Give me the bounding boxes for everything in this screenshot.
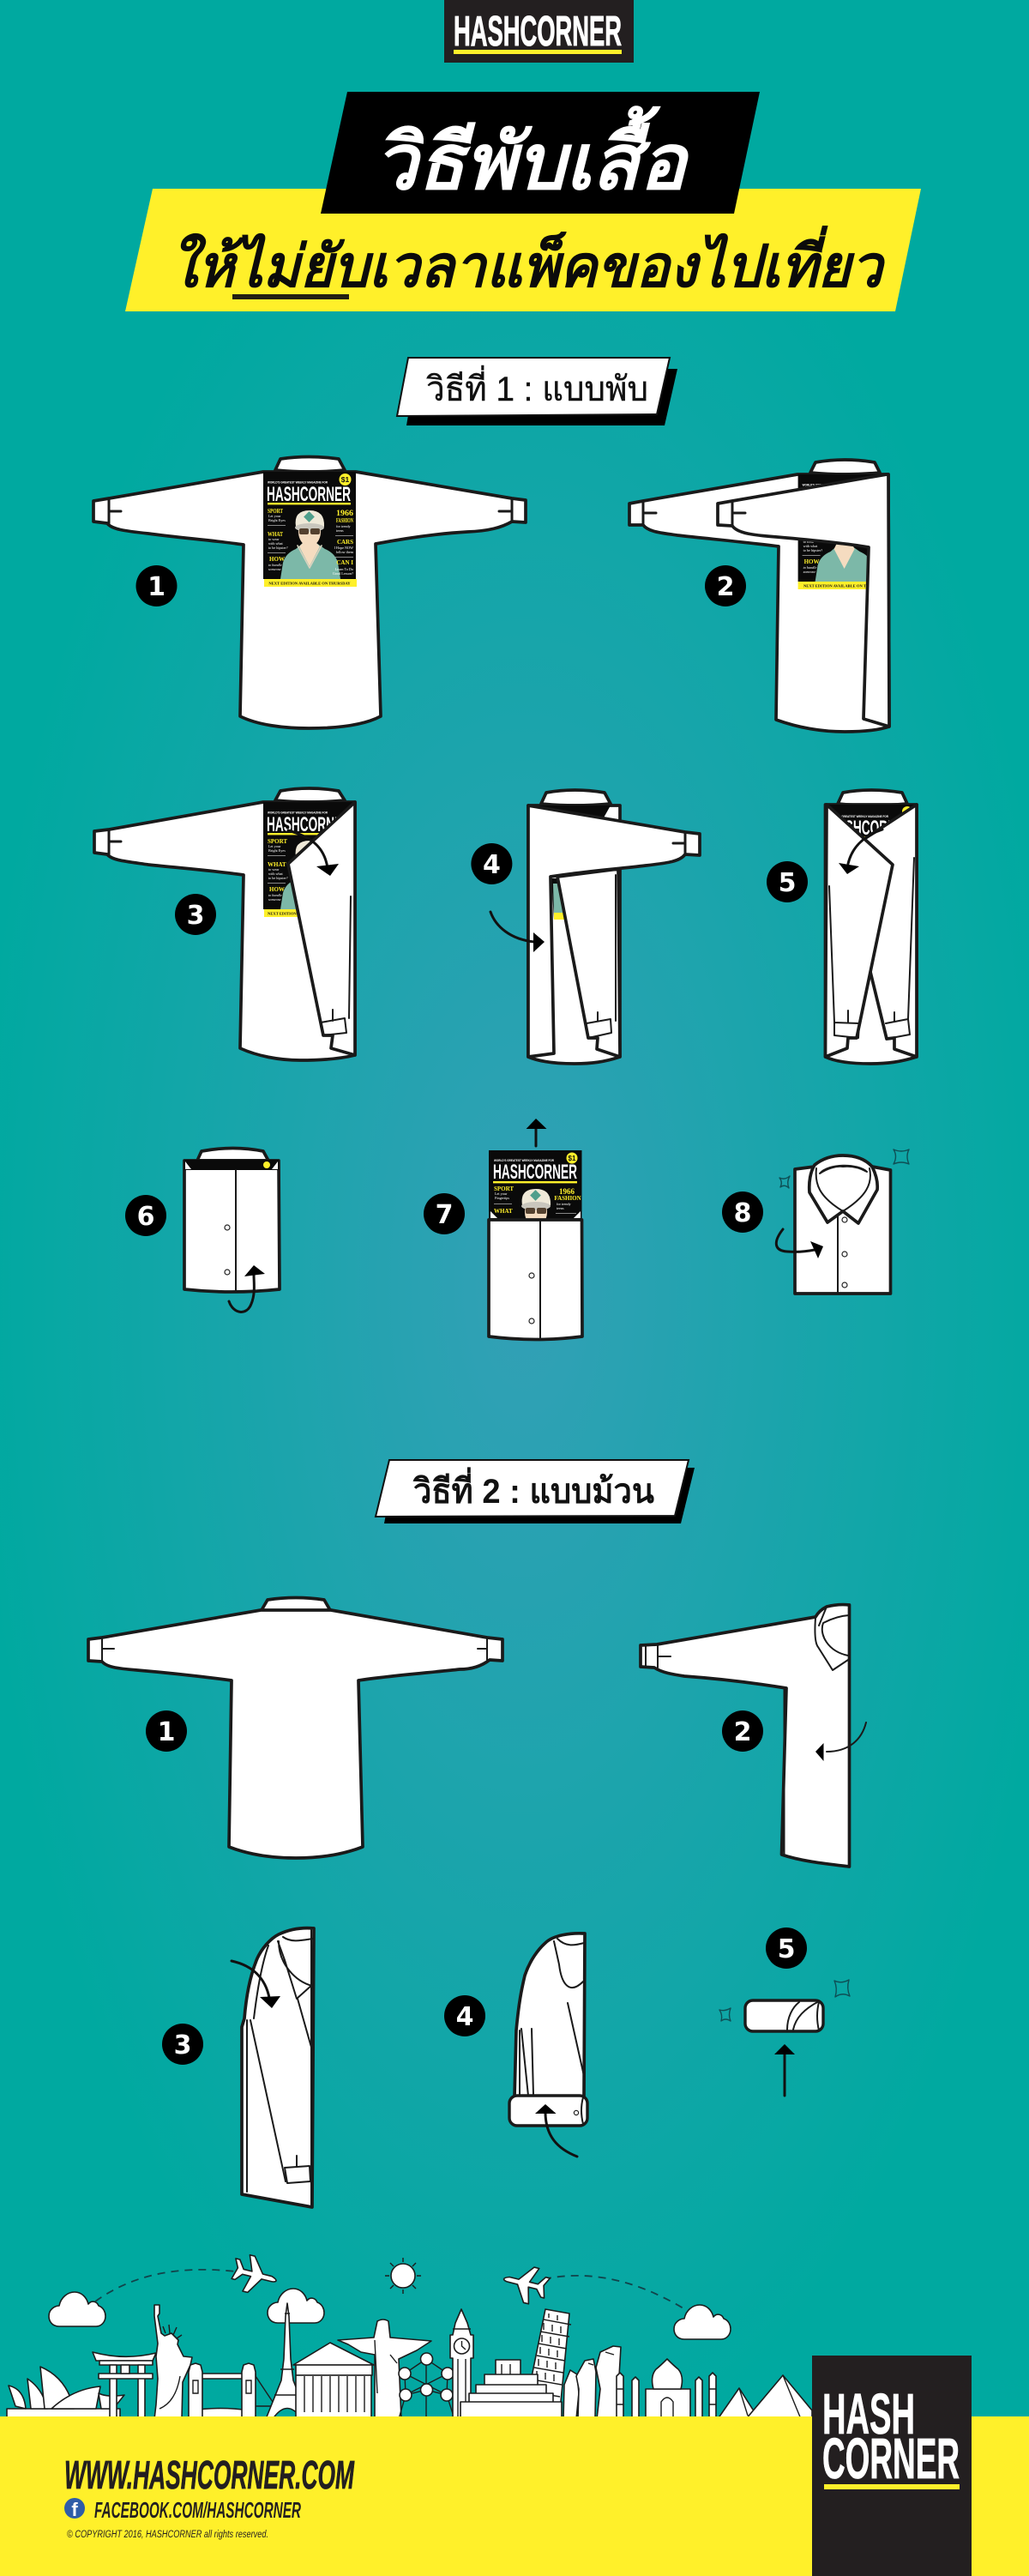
magazine cover: WHAT xyxy=(268,531,283,538)
icon: facebook xyxy=(64,2498,85,2520)
magazine cover: someone xyxy=(268,567,281,571)
torii gate xyxy=(93,2352,156,2418)
arrow xyxy=(229,1265,265,1312)
magazine partly covered: WORLD'S GREATEST WEEKLY MAGAZINE FOR xyxy=(803,482,863,487)
arrow up xyxy=(774,2044,795,2096)
planes xyxy=(228,2252,551,2308)
number badge 4: 4 xyxy=(483,850,501,880)
arrow xyxy=(288,830,339,876)
magazine partly covered: SPORT xyxy=(268,838,287,845)
number badge 3 xyxy=(175,894,216,935)
section label: method 1: วิธีที่ 1 : แบบพับ xyxy=(426,365,648,408)
roll xyxy=(509,2096,587,2126)
magazine partly covered xyxy=(798,474,888,589)
magazine partly covered: to be hipster? xyxy=(803,548,822,552)
number badge 1 xyxy=(135,565,177,606)
number badge 6: 6 xyxy=(137,1202,154,1232)
magazine cover: HASHCORNER xyxy=(267,483,351,506)
magazine partly covered: WORLD'S GREATEST WEEKLY MAGAZINE FOR xyxy=(268,810,328,815)
number badge 2-4 xyxy=(444,1995,485,2036)
christ the redeemer xyxy=(338,2320,431,2419)
icon: facebook: f xyxy=(71,2499,78,2520)
arrow xyxy=(815,1722,866,1761)
magazine cover: WORLD'S GREATEST WEEKLY MAGAZINE FOR xyxy=(268,480,328,484)
title banner xyxy=(125,92,921,311)
step 1-3: sleeve folded down xyxy=(94,788,355,1060)
magazine partly covered: to handle xyxy=(268,893,282,897)
step 1-5: both sides folded xyxy=(825,790,918,1064)
magazine cover: for trendy xyxy=(336,524,352,528)
magazine cover: teens xyxy=(336,528,344,533)
taj mahal with minarets xyxy=(617,2359,716,2419)
step 2-1: shirt open xyxy=(88,1597,502,1858)
sun xyxy=(385,2258,421,2294)
magazine top: Let your xyxy=(495,1191,508,1196)
magazine peek: HASHCORNER xyxy=(828,817,912,840)
magazine cover: HOW xyxy=(269,556,285,563)
section label: method 2: วิธีที่ 2 : แบบม้วน xyxy=(412,1467,654,1511)
step 1-4: other side folded xyxy=(490,790,700,1064)
arrow xyxy=(232,1961,280,2008)
step 2-5: finished roll xyxy=(719,1980,850,2096)
magazine cover: Learn To Do xyxy=(335,567,353,571)
magazine top: Fingertips xyxy=(495,1196,509,1200)
title line 2: ให้ไม่ยับเวลาแพ็คของไปเที่ยว xyxy=(170,226,886,299)
magazine cover: I Hope NOW xyxy=(334,546,353,550)
magazine partly covered: to handle xyxy=(803,565,816,570)
magazine top: 1966 xyxy=(559,1187,575,1196)
magazine top: $1 xyxy=(569,1155,576,1162)
magazine cover: to be hipster? xyxy=(268,546,288,550)
step 1-1: shirt open with magazine xyxy=(93,456,526,728)
number badge 8 xyxy=(722,1191,763,1233)
magazine top: WORLD'S GREATEST WEEKLY MAGAZINE FOR xyxy=(494,1158,554,1162)
tower bridge xyxy=(189,2363,273,2419)
magazine partly covered: NEXT EDITION AVAILABLE xyxy=(268,911,320,916)
magazine peek: WORLD'S GREATEST WEEKLY MAGAZINE FOR xyxy=(828,814,888,818)
magazine partly covered: someone xyxy=(803,570,815,574)
magazine top: for trendy xyxy=(557,1202,572,1206)
big ben xyxy=(450,2309,473,2419)
logo: top badge xyxy=(444,0,634,63)
magazine partly covered: HASHCORNER xyxy=(267,813,351,836)
number badge 3: 3 xyxy=(187,901,204,931)
magazine cover: SPORT xyxy=(268,508,283,515)
step 1-6: folded up xyxy=(184,1148,280,1312)
section label: method 2 xyxy=(376,1460,695,1523)
magazine cover: FASHION xyxy=(336,517,353,524)
title line 1: วิธีพับเสื้อ xyxy=(374,106,690,206)
magazine partly covered: Let your xyxy=(268,844,281,848)
number badge 4 xyxy=(471,843,512,884)
footer: facebook link: FACEBOOK.COM/HASHCORNER xyxy=(94,2497,301,2523)
skyline: world landmarks xyxy=(7,2252,812,2419)
magazine cover: Good Lesson? xyxy=(333,571,353,576)
number badge 2-3: 3 xyxy=(174,2030,191,2060)
number badge 7 xyxy=(424,1193,465,1234)
leaning tower of pisa xyxy=(523,2309,571,2419)
arrow up xyxy=(527,1119,547,1146)
number badge 2 xyxy=(705,565,746,606)
magazine partly covered xyxy=(263,802,355,917)
number badge 2: 2 xyxy=(717,572,734,602)
magazine cover: to handle xyxy=(268,563,282,567)
number badge 5: 5 xyxy=(779,868,796,898)
number badge 7: 7 xyxy=(436,1200,453,1230)
number badge 8: 8 xyxy=(734,1198,751,1228)
number badge 6 xyxy=(125,1195,166,1236)
magazine cover: CAN I xyxy=(336,559,353,566)
number badge 2-2 xyxy=(722,1710,763,1752)
number badge 2-4: 4 xyxy=(456,2002,473,2032)
magazine partly covered: to be hipster? xyxy=(268,876,288,880)
person xyxy=(280,510,340,579)
magazine top xyxy=(489,1150,581,1227)
magazine partly covered: with what xyxy=(803,544,818,548)
footer: website url: WWW.HASHCORNER.COM xyxy=(64,2452,355,2497)
arrow xyxy=(535,2104,577,2157)
magazine cover xyxy=(263,472,357,587)
step 1-2: left side folded xyxy=(629,460,889,732)
magazine top: FASHION xyxy=(554,1195,581,1202)
arrow xyxy=(776,1229,823,1258)
step 2-2: half folded xyxy=(641,1605,866,1867)
magazine cover: NEXT EDITION AVAILABLE ON THURSDAY xyxy=(268,582,351,585)
arrow xyxy=(490,912,545,952)
magazine partly covered: HOW xyxy=(804,558,819,565)
footer: copyright: © COPYRIGHT 2016, HASHCORNER all rights reserved. xyxy=(67,2530,268,2540)
number badge 1: 1 xyxy=(147,572,165,602)
atomium xyxy=(399,2353,454,2419)
magazine peek xyxy=(829,805,914,837)
magazine cover: $1 xyxy=(341,475,349,484)
easter island moai xyxy=(563,2346,621,2419)
magazine cover: to wear xyxy=(268,537,280,541)
sparkles xyxy=(719,1980,850,2021)
logo: footer block: HASH xyxy=(822,2382,915,2446)
sparkles xyxy=(779,1149,909,1188)
magazine top: SPORT xyxy=(494,1185,514,1192)
magazine partly covered: NEXT EDITION AVAILABLE ON THURSDAY xyxy=(803,583,886,588)
magazine partly covered: to wear xyxy=(803,540,815,544)
magazine cover: CARS xyxy=(337,539,353,546)
arrow xyxy=(839,830,882,874)
magazine cover: Let your xyxy=(268,514,281,518)
sydney opera house xyxy=(7,2367,124,2419)
magazine top: HASHCORNER xyxy=(493,1161,577,1184)
number badge 2-5: 5 xyxy=(778,1934,795,1964)
number badge 2-5 xyxy=(766,1927,807,1969)
magazine partly covered: someone xyxy=(268,897,281,902)
magazine top: WHAT xyxy=(494,1208,513,1215)
number badge 2-1: 1 xyxy=(158,1717,175,1747)
magazine cover: with what xyxy=(268,541,283,546)
step 1-8: finished folded shirt xyxy=(776,1149,909,1294)
number badge 2-1 xyxy=(146,1710,187,1752)
magazine partly covered: HOW xyxy=(269,886,285,893)
magazine cover: 1966 xyxy=(336,509,354,517)
eiffel tower xyxy=(266,2303,309,2419)
number badge 5 xyxy=(767,861,808,902)
magazine partly covered: WHAT xyxy=(268,861,286,868)
statue of liberty xyxy=(154,2305,192,2419)
pyramids xyxy=(718,2375,812,2419)
step 2-3: folded in half xyxy=(232,1928,314,2207)
step 1-7: magazine out xyxy=(489,1119,582,1340)
number badge 2-3 xyxy=(162,2024,203,2065)
section label: method 1 xyxy=(397,358,677,425)
clouds xyxy=(49,2289,731,2339)
logo: top badge: HASHCORNER xyxy=(454,9,622,55)
dashed flight paths xyxy=(95,2270,683,2308)
logo: footer block xyxy=(812,2356,972,2576)
step 2-4: rolling from bottom xyxy=(509,1934,587,2157)
number badge 2-2: 2 xyxy=(734,1717,751,1747)
magazine cover: Bright Eyes xyxy=(268,518,286,522)
magazine top: teens xyxy=(557,1206,564,1210)
magazine partly covered: to wear xyxy=(268,867,280,872)
footer: yellow band xyxy=(0,2416,1029,2576)
magazine partly covered: Bright Eyes xyxy=(268,848,286,853)
magazine cover: follow them xyxy=(336,550,354,554)
magazine partly covered: with what xyxy=(268,872,283,876)
chichen itza pyramid xyxy=(460,2360,562,2419)
pantheon xyxy=(293,2343,374,2418)
